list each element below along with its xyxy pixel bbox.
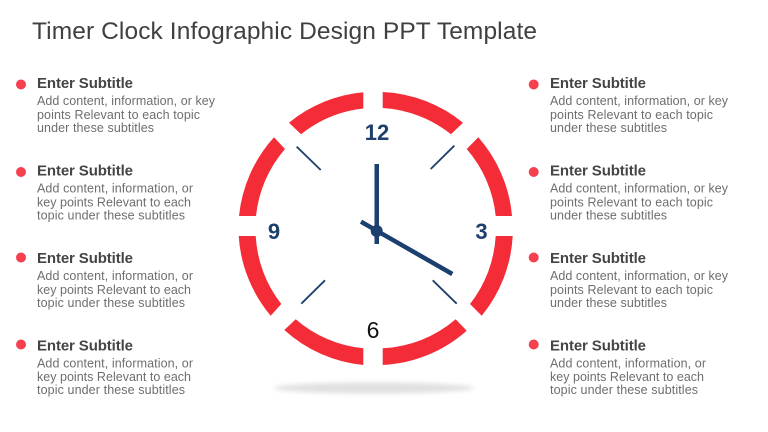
item: right 1: under these subtitles <box>550 121 667 135</box>
clock numerals: 12 <box>365 120 389 145</box>
item: right 2 <box>529 162 729 222</box>
item: right 3: Enter Subtitle <box>550 250 646 267</box>
clock hands <box>361 164 452 274</box>
item: left 2 <box>16 162 193 222</box>
item: left 2: key points Relevant to each <box>37 196 191 210</box>
item: left 4: key points Relevant to each <box>37 370 191 384</box>
item: right 3: Add content, information, or key <box>550 269 729 283</box>
clock shadow <box>274 382 474 394</box>
item: left 1: under these subtitles <box>37 121 154 135</box>
item: right 2: points Relevant to each topic <box>550 196 713 210</box>
item: right 4: key points Relevant to each <box>550 370 704 384</box>
item: left 4: Add content, information, or <box>37 356 193 370</box>
item: left 4: topic under these subtitles <box>37 383 185 397</box>
right column <box>529 75 729 397</box>
item: left 3 <box>16 250 193 310</box>
item: left 3: Add content, information, or <box>37 269 193 283</box>
item: right 3: points Relevant to each topic <box>550 283 713 297</box>
item: right 4: topic under these subtitles <box>550 383 698 397</box>
clock tick marks <box>297 146 457 304</box>
item: right 2: Add content, information, or key <box>550 182 729 196</box>
clock numerals: 9 <box>268 219 280 244</box>
item: right 4 <box>529 338 706 397</box>
item: right 2: Enter Subtitle <box>550 162 646 180</box>
item: left 4 <box>16 338 193 397</box>
item: right 1: Add content, information, or key <box>550 94 729 108</box>
item: left 1: points Relevant to each topic <box>37 108 200 122</box>
item: right 3: under these subtitles <box>550 296 667 310</box>
item: left 4: Enter Subtitle <box>37 338 133 354</box>
item: left 1 <box>16 75 216 135</box>
item: left 3: topic under these subtitles <box>37 296 185 310</box>
item: right 4: Enter Subtitle <box>550 338 646 354</box>
item: left 3: Enter Subtitle <box>37 250 133 267</box>
item: left 1: Enter Subtitle <box>37 75 133 92</box>
item: right 3 <box>529 250 729 310</box>
item: left 2: topic under these subtitles <box>37 208 185 222</box>
clock numerals: 3 <box>475 219 488 244</box>
item: left 1: Add content, information, or key <box>37 94 216 108</box>
item: right 2: under these subtitles <box>550 208 667 222</box>
item: left 2: Add content, information, or <box>37 182 193 196</box>
clock numerals <box>268 120 488 343</box>
left column <box>16 75 216 397</box>
item: right 4: Add content, information, or <box>550 356 706 370</box>
item: left 2: Enter Subtitle <box>37 162 133 180</box>
clock ring <box>239 92 513 365</box>
item: right 1: Enter Subtitle <box>550 75 646 92</box>
item: left 3: key points Relevant to each <box>37 283 191 297</box>
clock numerals: 6 <box>367 317 379 343</box>
title: Timer Clock Infographic Design PPT Template <box>32 18 537 45</box>
item: right 1: points Relevant to each topic <box>550 108 713 122</box>
clock <box>239 92 513 365</box>
item: right 1 <box>529 75 729 135</box>
